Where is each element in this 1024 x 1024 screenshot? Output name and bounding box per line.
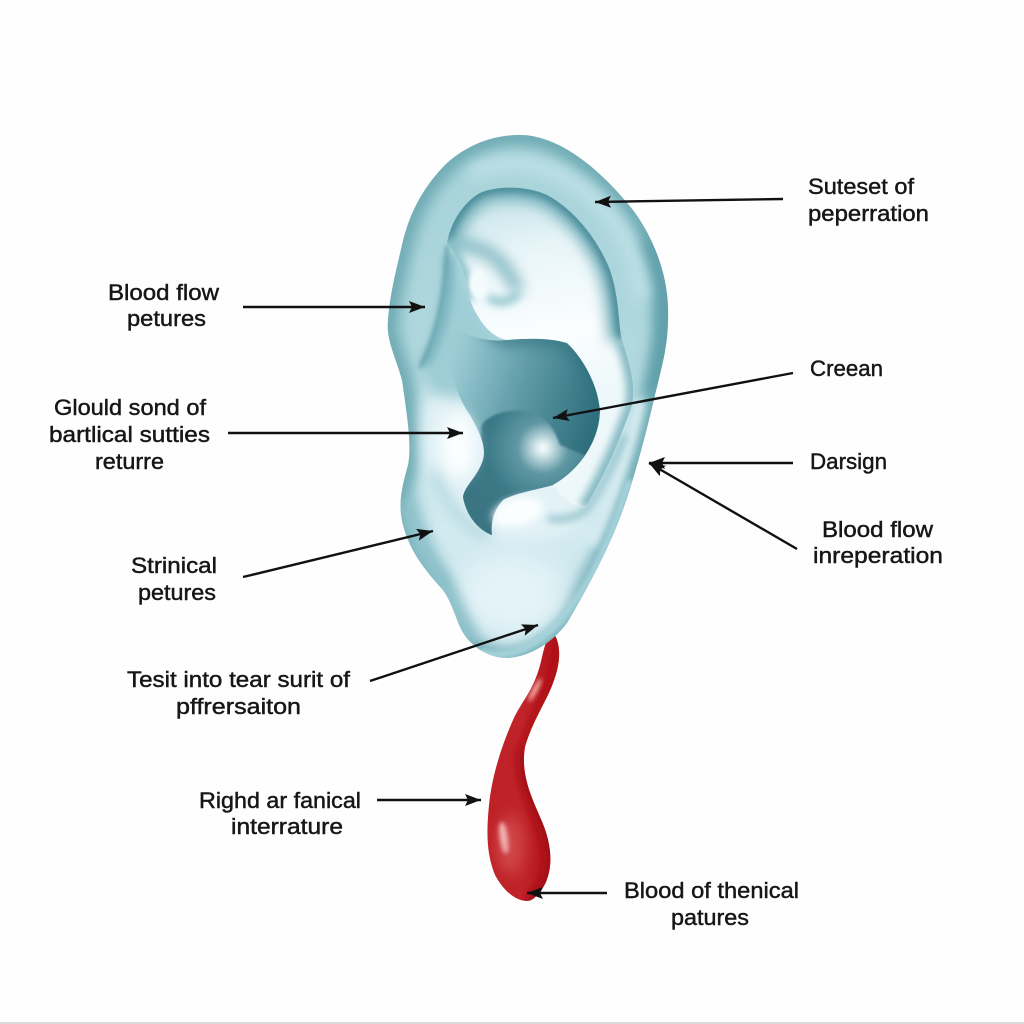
right strip shading <box>585 340 633 508</box>
label: Glould sond of bartlical sutties returre: returre <box>95 449 164 474</box>
top arc wide glow <box>447 188 622 340</box>
blood drop <box>487 636 560 901</box>
top arc shadow <box>447 188 622 340</box>
label: Tesit into tear surit of pffrersaiton <box>127 667 351 719</box>
label: Blood flow inreperation <box>813 517 943 568</box>
ear base shape <box>388 135 668 658</box>
label: Blood of thenical patures <box>624 878 799 930</box>
label: Strinical petures: petures <box>138 580 216 605</box>
label: Blood of thenical patures: Blood of thenical <box>624 878 799 903</box>
fold shade right of crease <box>424 255 449 365</box>
label: Righd ar fanical interrature <box>199 788 361 839</box>
label: Righd ar fanical interrature: Righd ar fanical <box>199 788 361 813</box>
lobe light <box>455 553 565 637</box>
drop highlight glow <box>496 815 524 875</box>
stem highlight <box>527 677 543 703</box>
label: Glould sond of bartlical sutties returre: Glould sond of <box>54 395 207 420</box>
label: Blood of thenical patures: patures <box>671 905 749 930</box>
label: Creean: Creean <box>810 356 883 381</box>
spiral light <box>469 269 487 299</box>
label: Blood flow petures <box>108 280 219 331</box>
arrow: stem <box>377 799 481 801</box>
spiral fold shadow <box>447 245 516 292</box>
label: Righd ar fanical interrature: interrature <box>231 814 343 839</box>
label: Glould sond of bartlical sutties returre: bartlical sutties <box>49 422 210 447</box>
arrow: lobe <box>370 625 538 681</box>
label: Tesit into tear surit of pffrersaiton: Tesit into tear surit of <box>127 667 351 692</box>
drop highlight <box>498 822 510 854</box>
arrow: top right <box>595 199 783 202</box>
label: Suteset of peperration: peperration <box>808 201 929 226</box>
left helix crease <box>420 245 447 368</box>
label: Glould sond of bartlical sutties returre <box>49 395 210 474</box>
lower light fold <box>489 492 547 532</box>
concha top shadow <box>476 338 600 406</box>
arrow: tragus <box>228 432 463 434</box>
right lower band light <box>590 400 640 545</box>
ear canal <box>463 410 585 535</box>
arrow: upper left <box>243 306 425 308</box>
arrow: drop <box>527 892 607 894</box>
right rim shadow <box>645 240 663 395</box>
upper white bowl <box>447 188 633 508</box>
ear shading <box>388 135 668 658</box>
lower bowl light <box>421 377 625 541</box>
label: Suteset of peperration <box>808 174 929 226</box>
label: Blood flow inreperation: inreperation <box>813 543 943 568</box>
left fill below crease <box>423 280 496 406</box>
lower crease under antitragus <box>433 470 490 537</box>
left lobe shading <box>406 500 468 640</box>
helix highlight <box>470 164 642 300</box>
concha <box>455 336 600 535</box>
label: Blood flow petures: petures <box>127 306 206 331</box>
label: Tesit into tear surit of pffrersaiton: pffrersaiton <box>176 694 301 719</box>
tragus light <box>441 413 475 477</box>
label: Suteset of peperration: Suteset of <box>808 174 915 199</box>
label: Blood flow inreperation: Blood flow <box>822 517 933 542</box>
drop right shading <box>524 747 550 901</box>
label: Strinical petures <box>131 553 217 605</box>
crease lower right <box>548 435 625 519</box>
arrow: right edge <box>649 462 793 464</box>
label: Strinical petures: Strinical <box>131 553 217 578</box>
label: Blood flow petures: Blood flow <box>108 280 219 305</box>
arrow: lower left <box>243 531 433 577</box>
lobe rim <box>480 480 630 655</box>
left boundary shade <box>447 243 470 300</box>
label: Darsign: Darsign <box>810 449 887 474</box>
stem shading <box>525 640 560 747</box>
curl below spiral <box>488 292 518 302</box>
arrow: concha <box>553 373 793 418</box>
arrow: right diagonal <box>649 463 797 549</box>
ear <box>388 135 668 658</box>
